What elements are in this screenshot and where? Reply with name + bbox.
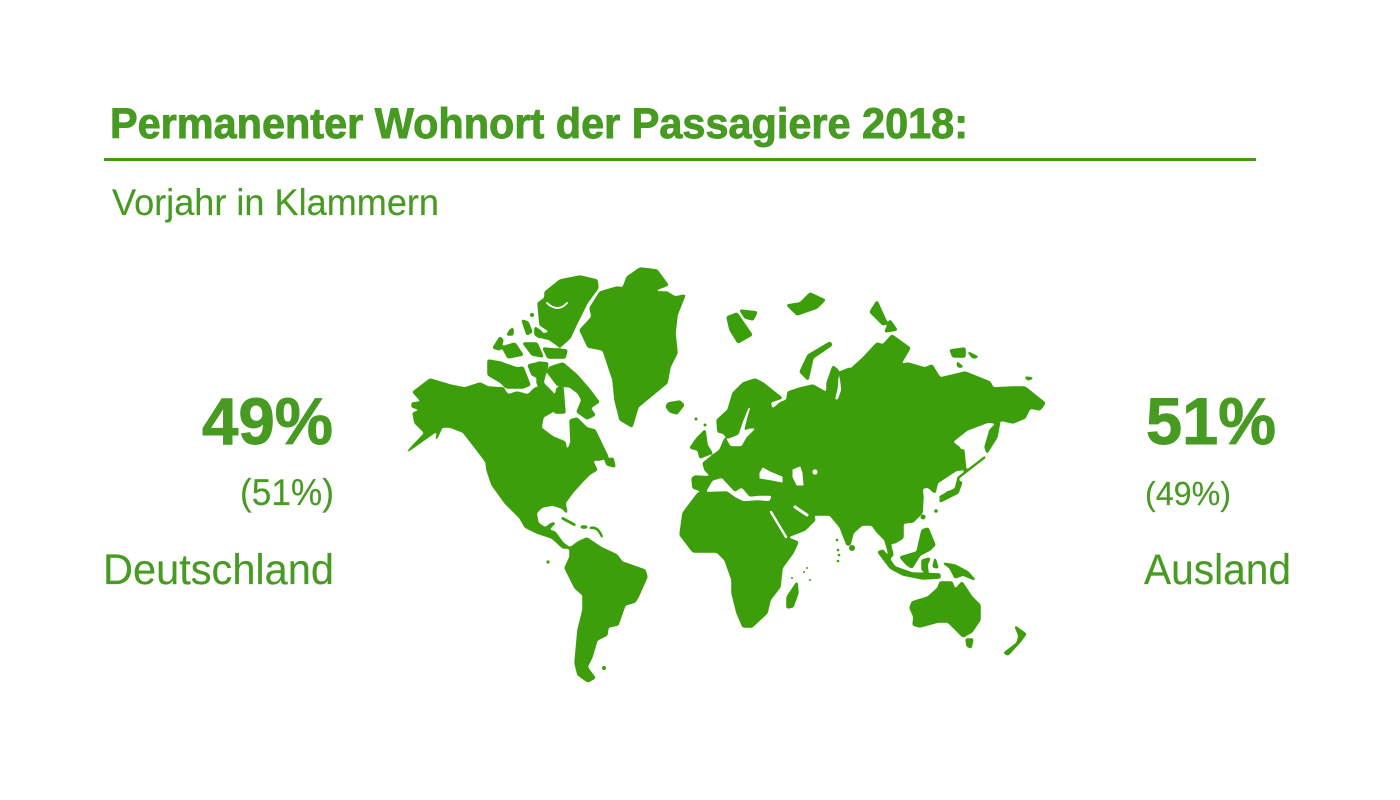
Iceland and British Isles — [666, 401, 712, 458]
previous year (49%): (49%) — [1145, 475, 1231, 512]
New Zealand — [1004, 626, 1026, 655]
Greenland — [580, 268, 685, 427]
Arctic Russia islands — [727, 293, 1033, 380]
Persian Gulf — [795, 507, 807, 515]
Eurasia — [692, 335, 1045, 558]
land masses — [407, 268, 1045, 682]
Southeast Asia islands — [878, 528, 975, 580]
Black Sea — [760, 468, 782, 482]
value 51%: 51% — [1146, 384, 1276, 458]
small islands — [530, 313, 938, 670]
South America — [565, 538, 647, 682]
Madagascar — [787, 582, 798, 608]
Ellesmere bay — [547, 303, 567, 308]
Aral Sea — [812, 469, 818, 475]
left statistic: Deutschland — [103, 384, 334, 594]
label Ausland: Ausland — [1144, 546, 1291, 594]
Red Sea — [771, 512, 786, 537]
right statistic: Ausland — [1144, 384, 1291, 594]
title: Permanenter Wohnort der Passagiere 2018: — [110, 100, 968, 148]
Africa — [680, 492, 798, 627]
Caspian Sea — [793, 467, 803, 485]
previous year (51%): (51%) — [240, 472, 334, 513]
Tasmania — [966, 639, 973, 648]
value 49%: 49% — [202, 384, 333, 458]
North America — [407, 379, 608, 548]
Arctic Canada islands — [488, 276, 615, 467]
world map — [407, 268, 1045, 682]
inland seas — [547, 303, 818, 537]
Japan and Pacific arc — [940, 450, 985, 502]
subtitle: Vorjahr in Klammern — [112, 182, 439, 223]
Caribbean islands — [562, 518, 602, 537]
Australia — [910, 582, 980, 637]
label Deutschland: Deutschland — [103, 546, 334, 594]
